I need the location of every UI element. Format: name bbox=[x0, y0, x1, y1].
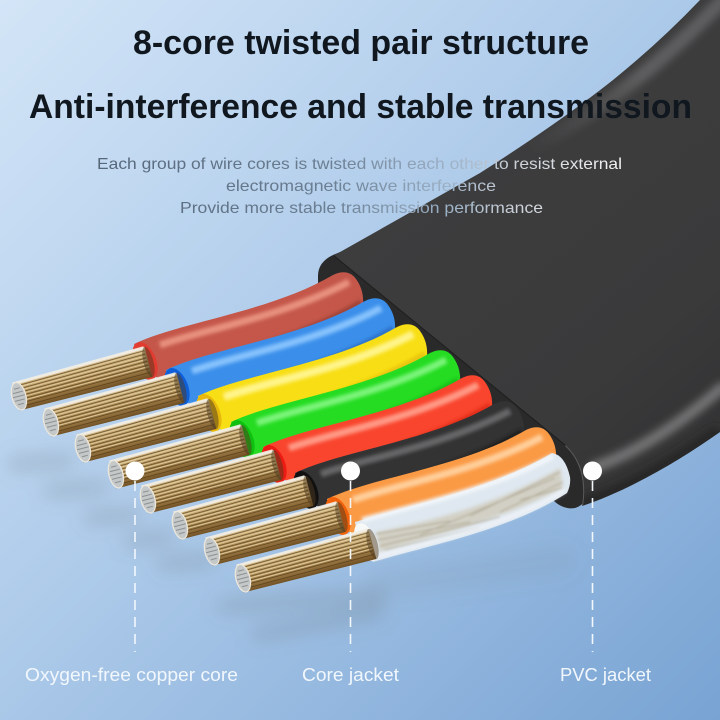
callout: oxygen-free copper core: Oxygen-free copper core bbox=[25, 665, 238, 685]
wire 4: green bbox=[105, 350, 460, 491]
wire 3: yellow bbox=[72, 324, 427, 465]
title line 2: Anti-interference and stable transmission bbox=[29, 88, 692, 126]
description text bbox=[97, 156, 622, 217]
wire 8: clear jacket with twisted strands bbox=[232, 453, 570, 595]
callout: oxygen-free copper core bbox=[25, 462, 238, 685]
wire 7: orange bbox=[201, 427, 556, 568]
callout: PVC jacket: PVC jacket bbox=[560, 665, 651, 685]
PVC cable jacket body bbox=[333, 0, 720, 506]
callout: core jacket bbox=[302, 462, 399, 685]
wire 2: blue bbox=[40, 298, 395, 439]
description text: electromagnetic wave interference bbox=[226, 178, 496, 195]
callout: core jacket: Core jacket bbox=[302, 665, 399, 685]
title line 1: 8-core twisted pair structure bbox=[133, 24, 589, 62]
description text: Each group of wire cores is twisted with each other to resist external bbox=[97, 156, 622, 173]
callout: PVC jacket bbox=[560, 462, 651, 685]
wire 6: black bbox=[169, 401, 524, 542]
wire 5: red bbox=[137, 375, 492, 516]
wire 1: brick red bbox=[8, 272, 363, 413]
cable front lip bbox=[318, 250, 592, 508]
wire shadows bbox=[14, 460, 560, 634]
description text: Provide more stable transmission performance bbox=[180, 200, 543, 217]
